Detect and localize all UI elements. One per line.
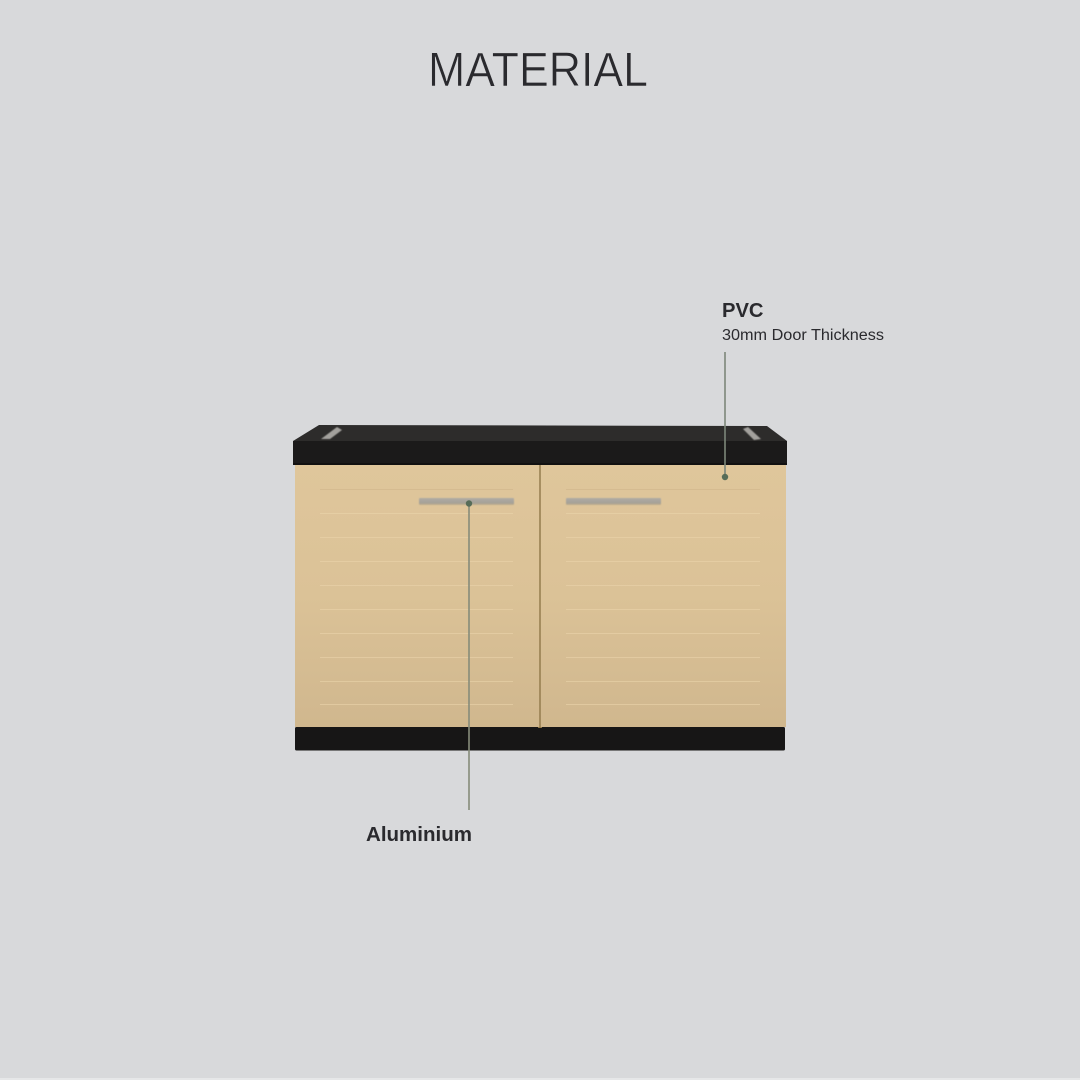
PVC description: 30mm Door Thickness bbox=[722, 327, 884, 344]
cabinet base bbox=[295, 727, 785, 750]
PVC leader line bbox=[724, 352, 726, 477]
left door handle bbox=[419, 498, 514, 505]
title: MATERIAL bbox=[428, 44, 648, 97]
callout: Aluminium bbox=[366, 500, 472, 846]
left door bbox=[295, 465, 539, 727]
Aluminium leader line bbox=[468, 503, 470, 810]
Aluminium label: Aluminium bbox=[366, 823, 472, 846]
cabinet bbox=[293, 425, 787, 750]
PVC label: PVC bbox=[722, 300, 764, 322]
right door bbox=[541, 465, 786, 727]
callout: PVC bbox=[722, 300, 884, 480]
Aluminium marker dot bbox=[466, 500, 472, 507]
cabinet body gap bbox=[538, 465, 542, 728]
right door handle bbox=[566, 498, 661, 505]
PVC marker dot bbox=[722, 474, 728, 480]
cabinet top panel bbox=[293, 425, 787, 465]
